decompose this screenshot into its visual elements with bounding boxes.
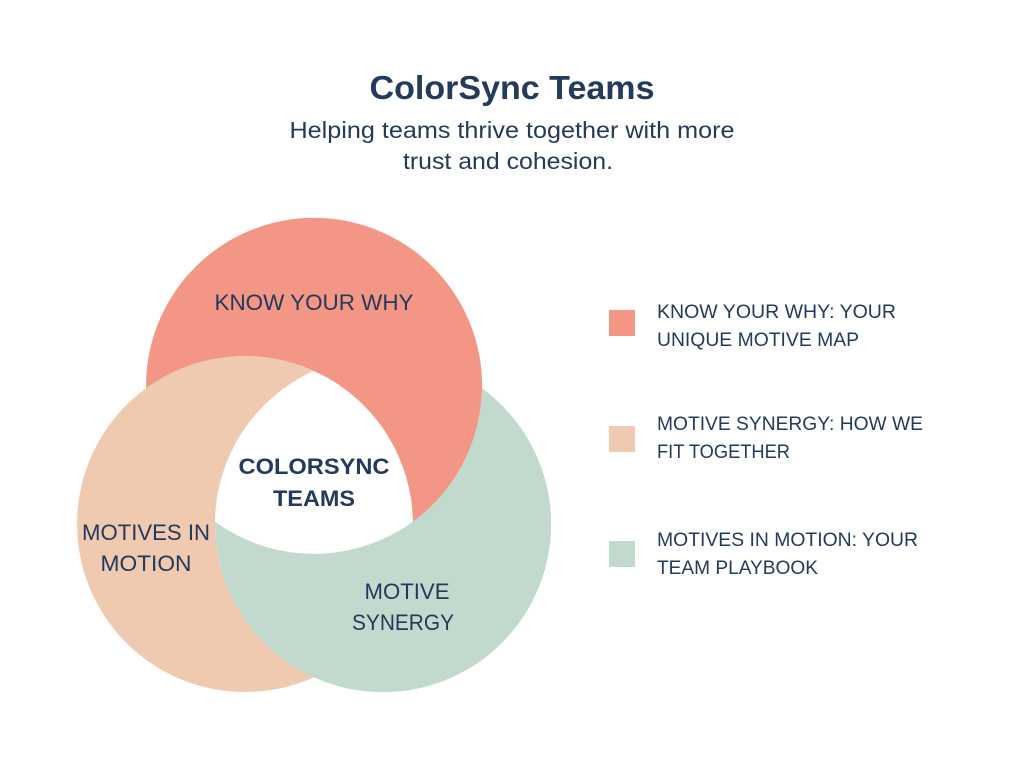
legend item: motives in motion: TEAM PLAYBOOK bbox=[657, 557, 818, 579]
subtitle: Helping teams thrive together with more bbox=[290, 117, 734, 143]
segment: motives in motion bbox=[77, 356, 314, 692]
venn diagram bbox=[77, 218, 551, 692]
label: motive synergy: SYNERGY bbox=[352, 610, 454, 635]
label: motives in motion: MOTIVES IN bbox=[82, 520, 210, 545]
subtitle bbox=[290, 117, 734, 174]
legend item: motive synergy bbox=[609, 413, 923, 463]
legend item: motive synergy: MOTIVE SYNERGY: HOW WE bbox=[657, 413, 923, 435]
subtitle: trust and cohesion. bbox=[403, 148, 613, 174]
legend bbox=[609, 301, 923, 579]
legend item: motives in motion: MOTIVES IN MOTION: YOUR bbox=[657, 529, 918, 551]
label: motives in motion: MOTION bbox=[100, 551, 192, 576]
legend item: motive synergy: FIT TOGETHER bbox=[657, 441, 790, 463]
label: center: COLORSYNC bbox=[238, 454, 390, 479]
legend item: motives in motion bbox=[609, 529, 918, 579]
label: motive synergy: MOTIVE bbox=[364, 579, 450, 604]
label: know your why: KNOW YOUR WHY bbox=[214, 290, 414, 315]
legend item: know your why bbox=[609, 301, 896, 351]
label: motive synergy bbox=[352, 579, 454, 635]
segment: know your why bbox=[146, 218, 482, 522]
legend item: know your why: KNOW YOUR WHY: YOUR bbox=[657, 301, 896, 323]
segment: motive synergy bbox=[215, 388, 551, 692]
legend item: know your why: UNIQUE MOTIVE MAP bbox=[657, 329, 859, 351]
label: center bbox=[238, 454, 390, 511]
title: ColorSync Teams bbox=[370, 69, 654, 106]
label: center: TEAMS bbox=[273, 486, 355, 511]
label: motives in motion bbox=[82, 520, 210, 576]
